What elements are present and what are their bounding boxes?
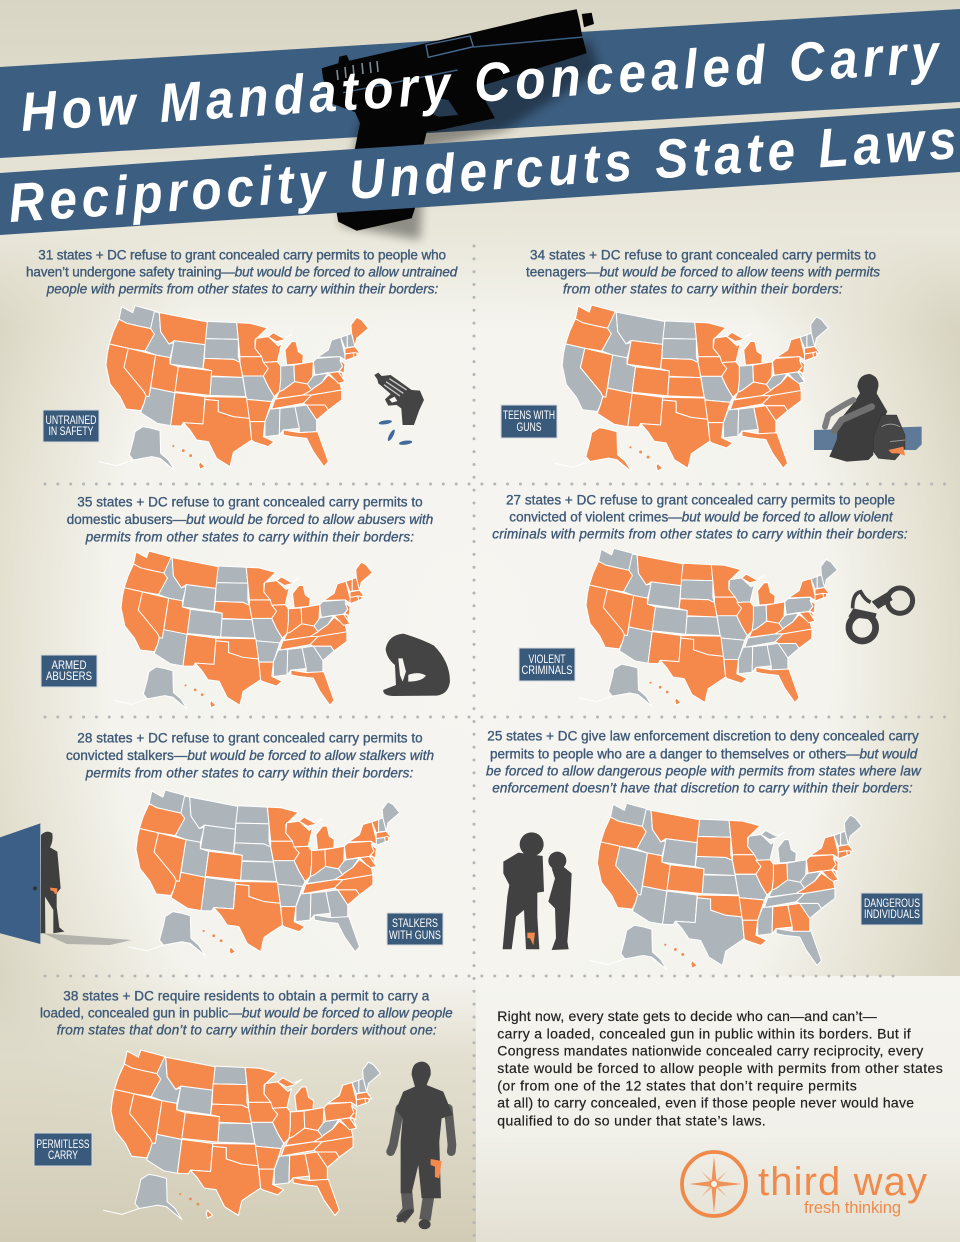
label: violent criminals: CRIMINALS bbox=[522, 665, 573, 677]
label: untrained in safety: UNTRAINED bbox=[46, 415, 96, 427]
body text: state would be forced to allow people with permits from other states bbox=[497, 1060, 943, 1076]
heading: panel 7: from states that don’t to carry within their borders without one: bbox=[57, 1022, 437, 1037]
label: violent criminals: VIOLENT bbox=[528, 654, 566, 666]
heading: panel 5 bbox=[66, 731, 434, 780]
label: teens with guns: TEENS WITH bbox=[503, 410, 555, 422]
icon: man with concealed gun bbox=[391, 1062, 453, 1229]
logo: third way: fresh thinking bbox=[804, 1199, 901, 1217]
label: untrained in safety: IN SAFETY bbox=[48, 426, 94, 438]
title band: bottom bbox=[0, 108, 960, 235]
map: panel 7 bbox=[103, 1050, 380, 1219]
label: permitless carry: CARRY bbox=[48, 1150, 78, 1162]
dotted dividers bbox=[45, 246, 950, 1240]
heading: panel 1 bbox=[26, 248, 458, 296]
heading: panel 6 bbox=[486, 729, 922, 796]
map: panel 4 bbox=[579, 548, 837, 706]
label: untrained in safety bbox=[43, 410, 99, 442]
heading: panel 7: loaded, concealed gun in public—but would be forced to allow people bbox=[40, 1006, 453, 1021]
label: dangerous individuals: DANGEROUS bbox=[864, 898, 920, 910]
heading: panel 1: people with permits from other states to carry within their borders: bbox=[46, 282, 439, 296]
heading: panel 7: 38 states + DC require residents to obtain a permit to carry a bbox=[63, 989, 430, 1004]
heading: panel 6: permits to people who are a danger to themselves or others—but would bbox=[490, 746, 918, 761]
icon: pistol bbox=[322, 9, 600, 240]
title bbox=[7, 24, 958, 235]
logo: third way: third way bbox=[758, 1160, 927, 1204]
heading: panel 5: convicted stalkers—but would be forced to allow stalkers with bbox=[66, 748, 434, 763]
body text: qualified to do so under that state’s laws. bbox=[497, 1113, 766, 1129]
title: Reciprocity Undercuts State Laws bbox=[7, 110, 958, 235]
label: violent criminals bbox=[519, 648, 575, 681]
label: permitless carry: PERMITLESS bbox=[36, 1139, 90, 1151]
map: panel 3 bbox=[114, 551, 372, 709]
body text: (or from one of the 12 states that don’t require permits bbox=[497, 1077, 857, 1093]
heading: panel 5: 28 states + DC refuse to grant concealed carry permits to bbox=[77, 731, 423, 746]
heading: panel 3: permits from other states to carry within their borders: bbox=[85, 530, 414, 544]
heading: panel 1: haven’t undergone safety training—but would be forced to allow untrained bbox=[26, 264, 458, 280]
body text: carry a loaded, concealed gun in public within its borders. But if bbox=[497, 1025, 911, 1041]
heading: panel 2: 34 states + DC refuse to grant concealed carry permits to bbox=[530, 248, 876, 262]
title: How Mandatory Concealed Carry bbox=[19, 24, 943, 144]
icon: handgun and bullets bbox=[374, 373, 424, 446]
logo: third way bbox=[682, 1152, 927, 1217]
label: teens with guns: GUNS bbox=[516, 422, 542, 434]
label: permitless carry bbox=[34, 1133, 92, 1166]
heading: panel 6: be forced to allow dangerous people with permits from states where law bbox=[486, 764, 922, 779]
heading: panel 2: teenagers—but would be forced to allow teens with permits bbox=[526, 264, 880, 280]
map: panel 1 bbox=[98, 306, 368, 471]
icon: seated teen with backpack bbox=[814, 374, 922, 462]
label: dangerous individuals bbox=[861, 893, 923, 925]
title band: top bbox=[0, 9, 960, 158]
heading: panel 3: 35 states + DC refuse to grant concealed carry permits to bbox=[77, 495, 423, 510]
label: armed abusers: ABUSERS bbox=[46, 671, 92, 683]
heading: panel 5: permits from other states to carry within their borders: bbox=[85, 766, 414, 780]
heading: panel 4: 27 states + DC refuse to grant concealed carry permits to people bbox=[506, 492, 895, 507]
icon: handcuffs bbox=[848, 588, 913, 641]
map: panel 5 bbox=[128, 790, 400, 956]
label: dangerous individuals: INDIVIDUALS bbox=[864, 909, 920, 921]
heading: panel 4 bbox=[492, 492, 908, 542]
heading: panel 7 bbox=[40, 989, 453, 1037]
label: stalkers with guns bbox=[387, 913, 443, 945]
heading: panel 3 bbox=[67, 495, 433, 544]
heading: panel 4: criminals with permits from other states to carry within their borders: bbox=[492, 526, 908, 542]
heading: panel 6: 25 states + DC give law enforcement discretion to deny concealed carry bbox=[487, 729, 919, 744]
body text bbox=[497, 1008, 943, 1129]
label: stalkers with guns: WITH GUNS bbox=[389, 930, 441, 942]
label: teens with guns bbox=[501, 405, 557, 438]
icon: man confronting woman bbox=[503, 832, 572, 950]
label: stalkers with guns: STALKERS bbox=[392, 918, 438, 930]
body text: Right now, every state gets to decide who can—and can’t— bbox=[497, 1008, 877, 1024]
heading: panel 2 bbox=[526, 248, 880, 296]
label: armed abusers bbox=[41, 655, 97, 687]
map: panel 6 bbox=[590, 803, 862, 970]
heading: panel 4: convicted of violent crimes—but would be forced to allow violent bbox=[509, 510, 894, 525]
heading: panel 1: 31 states + DC refuse to grant concealed carry permits to people who bbox=[38, 248, 446, 262]
icon: man at open door bbox=[0, 823, 132, 945]
label: armed abusers: ARMED bbox=[52, 660, 86, 672]
icon: crouching victim bbox=[383, 634, 450, 696]
body text: Congress mandates nationwide concealed carry reciprocity, every bbox=[497, 1043, 923, 1059]
heading: panel 6: enforcement doesn’t have that discretion to carry within their borders: bbox=[492, 781, 913, 796]
heading: panel 3: domestic abusers—but would be forced to allow abusers with bbox=[67, 512, 433, 527]
body text: at all) to carry concealed, even if those people never would have bbox=[497, 1095, 914, 1111]
map: panel 2 bbox=[554, 305, 828, 472]
heading: panel 2: from other states to carry within their borders: bbox=[563, 282, 843, 296]
